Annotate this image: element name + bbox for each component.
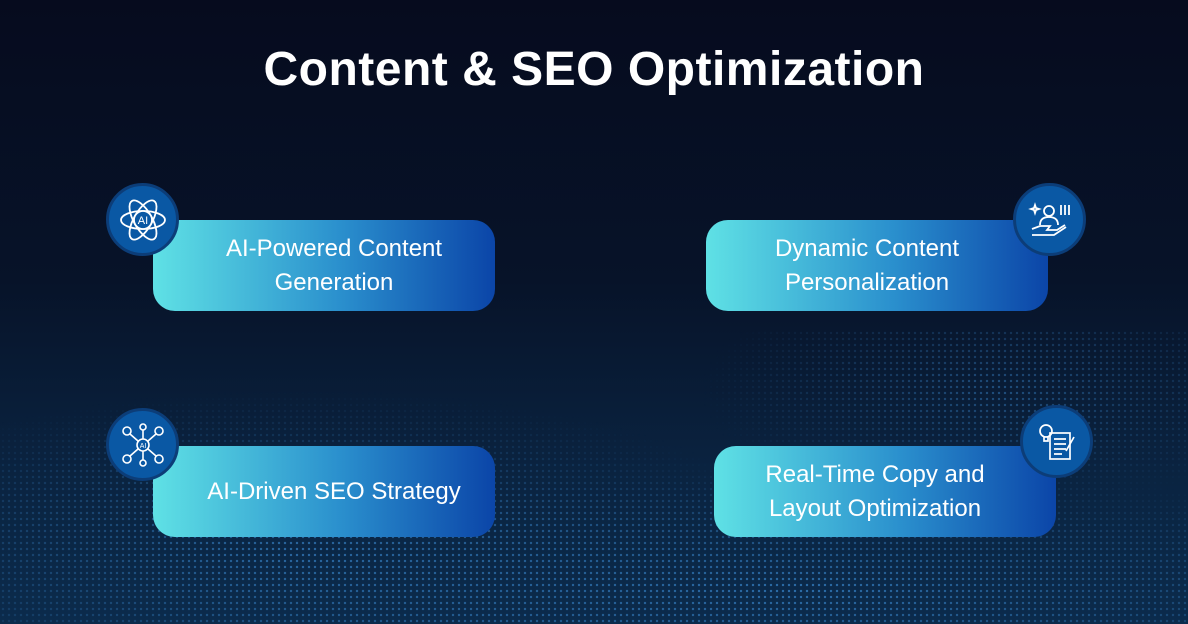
icon: document lightbulb	[1020, 405, 1093, 478]
card: Dynamic Content Personalization: Dynamic Content	[775, 234, 959, 262]
card: Real-Time Copy and Layout Optimization	[714, 446, 1056, 537]
title: Content & SEO Optimization	[264, 43, 924, 96]
icon: AI atom: AI	[137, 214, 148, 226]
card: AI-Powered Content Generation: Generation	[275, 268, 393, 296]
card: AI-Powered Content Generation: AI-Powered Content	[226, 234, 442, 262]
icon: person hand	[1013, 183, 1086, 256]
card: Real-Time Copy and Layout Optimization: Layout Optimization	[769, 494, 981, 522]
card: Real-Time Copy and Layout Optimization: Real-Time Copy and	[765, 460, 985, 488]
card: AI-Driven SEO Strategy: AI-Driven SEO Strategy	[207, 478, 461, 504]
card: Dynamic Content Personalization	[706, 220, 1048, 311]
icon: AI network: AI	[139, 442, 146, 450]
icon: AI atom	[106, 183, 179, 256]
icon: AI network	[106, 408, 179, 481]
card: Dynamic Content Personalization: Personalization	[785, 268, 949, 296]
card: AI-Powered Content Generation	[153, 220, 495, 311]
card: AI-Driven SEO Strategy	[153, 446, 495, 537]
